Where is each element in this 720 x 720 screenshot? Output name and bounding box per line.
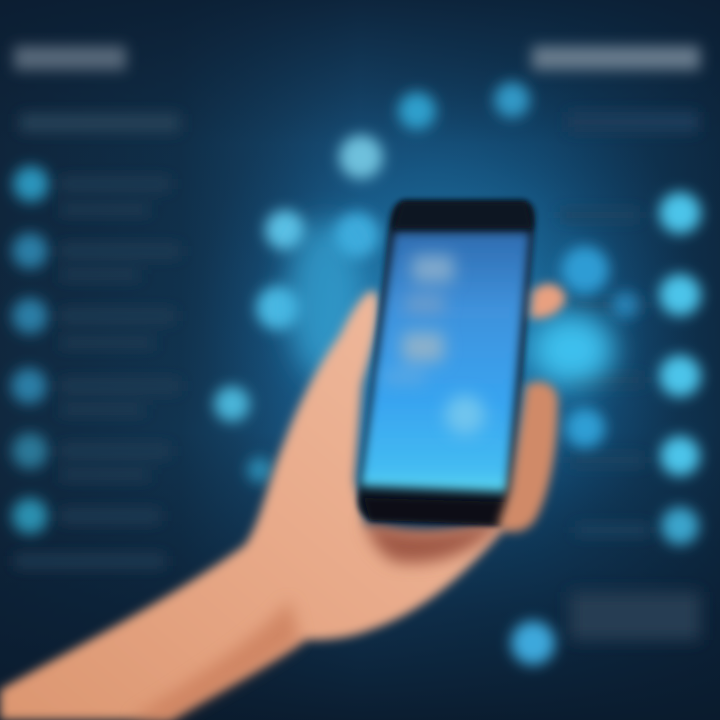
finger top right: [530, 284, 566, 318]
icon: glow behind phone: [287, 220, 614, 386]
arm shadow: [130, 600, 300, 720]
panel: left heading: [14, 46, 180, 132]
panel: left list: [11, 166, 180, 567]
arm and palm: [0, 291, 510, 720]
text block: lower right lines: [570, 592, 700, 640]
hand fingers: [498, 284, 566, 532]
palm shadow: [365, 518, 505, 563]
text block: left list lines: [15, 178, 180, 567]
icon: floating app dots: [214, 82, 639, 665]
icon: right bullets: [659, 192, 701, 545]
hand and arm: [0, 291, 510, 720]
panel: right list: [560, 192, 701, 640]
icon: left bullets: [11, 166, 49, 534]
text block: right list lines: [560, 210, 650, 535]
panel: right heading: [532, 46, 700, 132]
phone screen: [360, 232, 530, 492]
fingers right: [498, 382, 558, 532]
phone bottom bezel: [364, 498, 506, 524]
screen content: [385, 255, 485, 435]
phone top bezel: [394, 202, 532, 228]
phone: [358, 200, 535, 525]
phone body: [358, 200, 535, 525]
